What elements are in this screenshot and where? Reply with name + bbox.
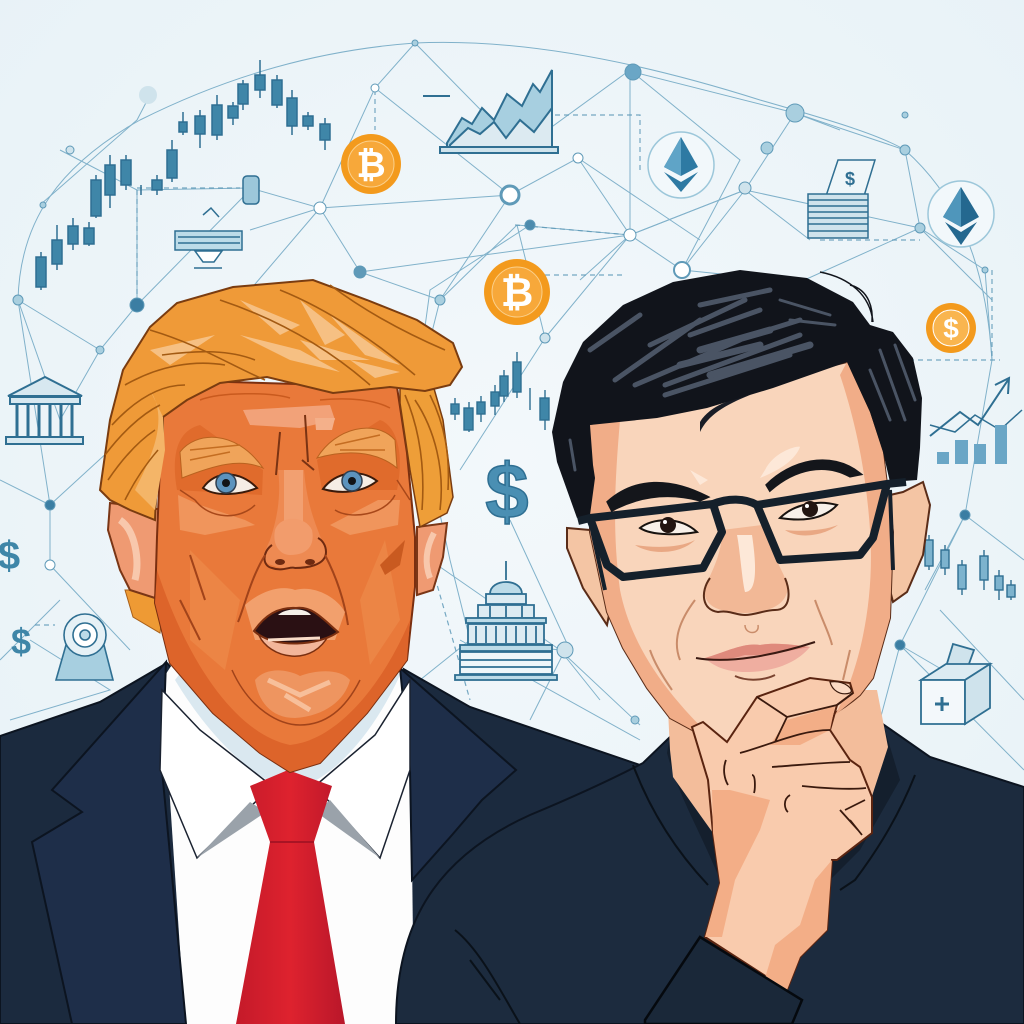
person left: suit and shirt — [0, 660, 640, 1024]
brow ridge — [175, 425, 263, 495]
moustache area — [245, 588, 345, 640]
network nodes — [13, 40, 988, 724]
icon: dollar signs left — [0, 534, 31, 662]
lower lip — [258, 632, 330, 656]
icon: bitcoin coin centre: ₿ — [501, 271, 533, 315]
icon: dollar sign centre: $ — [485, 447, 529, 535]
tie — [236, 770, 345, 1024]
chin — [255, 670, 350, 718]
icon: bitcoin coin centre — [484, 259, 550, 325]
icon: small candles right — [925, 535, 1015, 600]
person left: hair — [100, 280, 462, 527]
smile lines — [650, 600, 850, 690]
collar left — [160, 690, 272, 858]
eyebrows — [608, 483, 707, 510]
icon: ballot box — [921, 644, 990, 724]
jaw shading — [155, 570, 410, 772]
icon: chart right with arrow — [930, 378, 1022, 464]
icon: dollar coin right — [926, 303, 976, 353]
forehead highlights — [760, 447, 800, 478]
candlestick chart upper left — [36, 60, 330, 290]
icon: dollar coin right: $ — [943, 313, 959, 344]
shirt — [162, 660, 414, 1024]
person right: glasses — [578, 482, 906, 590]
forehead furrows — [276, 415, 314, 475]
collar right — [315, 680, 410, 858]
mouth — [705, 644, 810, 672]
face side shading — [590, 420, 720, 745]
person right: ears — [567, 482, 930, 625]
nose — [704, 525, 788, 613]
forehead highlights — [243, 405, 335, 428]
undereye patches — [178, 495, 255, 535]
icon: safe machine left — [56, 614, 113, 680]
person left: face — [155, 380, 415, 772]
icon: stack of cash: $ — [845, 169, 855, 189]
left lapel — [32, 662, 186, 1024]
eyebrows — [180, 437, 263, 478]
icon: bank building — [6, 377, 83, 444]
icon: area chart top — [423, 70, 558, 153]
icon: stack of cash — [808, 160, 875, 238]
icon: capitol building — [455, 561, 557, 680]
person right: hair — [552, 270, 922, 518]
person right: sleeve cuff — [645, 937, 802, 1024]
icon: bitcoin coin top — [341, 134, 401, 194]
nose — [262, 470, 327, 569]
hand shadow — [705, 790, 770, 937]
person right: hand — [692, 678, 872, 990]
icon: bitcoin coin top: ₿ — [356, 144, 386, 185]
eye sockets — [635, 540, 695, 552]
person right: face — [590, 362, 893, 745]
right lapel — [400, 668, 516, 880]
icon: small candles centre — [451, 352, 549, 432]
eye bags — [180, 480, 410, 516]
person left: ears and back hair — [108, 503, 447, 633]
philtrum — [745, 625, 758, 632]
person right: neck — [667, 690, 888, 840]
smile lines — [180, 555, 348, 640]
network lines — [0, 42, 1024, 770]
cheek shapes — [190, 550, 240, 670]
icon: ethereum top — [648, 132, 714, 198]
jaw shadow on shirt — [175, 660, 400, 790]
icon: ethereum right — [928, 181, 994, 247]
person right: body — [396, 720, 1024, 1024]
eyes — [203, 474, 257, 494]
icon: dollar signs left: $ — [11, 621, 31, 662]
eyes — [640, 520, 697, 534]
icon: small device and podium — [175, 176, 259, 268]
mouth — [254, 608, 338, 644]
